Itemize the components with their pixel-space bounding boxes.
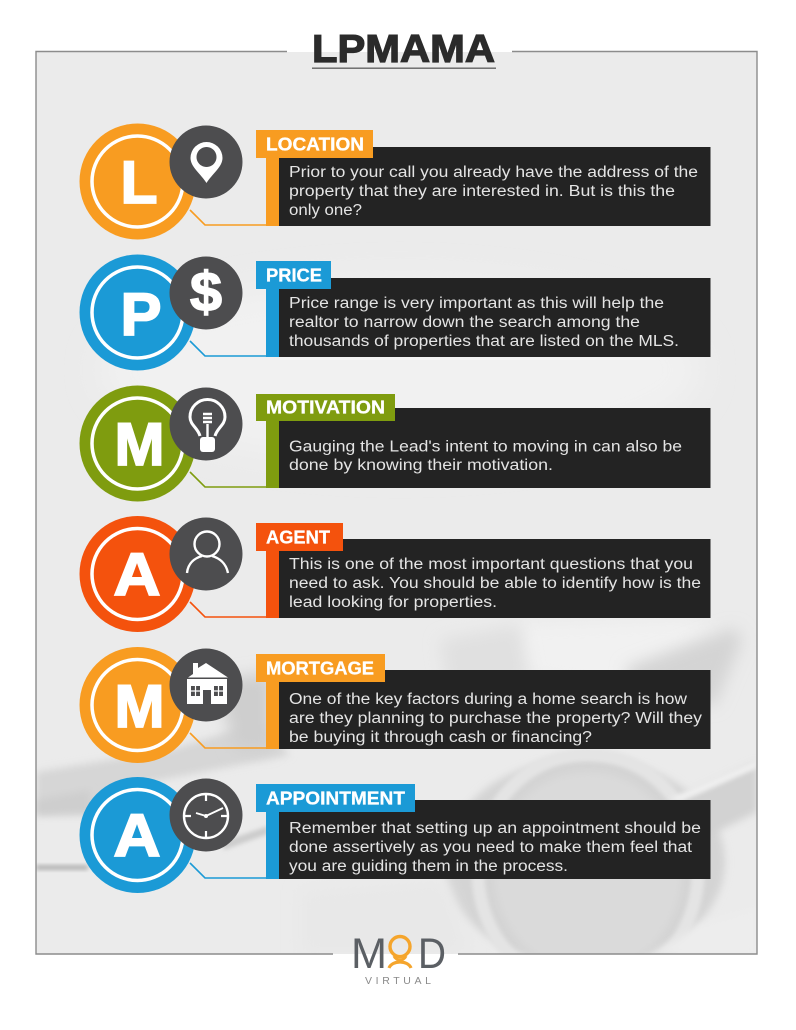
label tab (256, 654, 385, 749)
description box: done by knowing their motivation. (289, 457, 553, 474)
row: location (80, 124, 710, 240)
icon: map pin (170, 126, 242, 198)
letter badge M: M (114, 673, 164, 740)
letter badge M (80, 647, 196, 763)
row: mortgage (80, 647, 710, 763)
icon: clock (170, 778, 242, 852)
description box (279, 670, 710, 749)
description box: only one? (289, 202, 362, 219)
letter badge A: A (114, 802, 160, 869)
label tab: LOCATION (266, 134, 364, 154)
logo: M (351, 930, 387, 978)
connector line (190, 733, 268, 748)
label tab: PRICE (266, 266, 322, 286)
description box (279, 539, 710, 618)
icon: light bulb (170, 388, 242, 460)
letter badge L (80, 124, 196, 240)
letter badge A: A (114, 541, 160, 608)
label tab: APPOINTMENT (266, 788, 405, 808)
description box: done assertively as you need to make them feel that (289, 839, 693, 856)
connector line (190, 863, 268, 878)
icon: dollar sign (170, 256, 242, 330)
letter badge A (80, 516, 196, 632)
connector line (190, 472, 268, 487)
row: agent (80, 516, 710, 632)
letter badge M (80, 386, 196, 502)
description box: This is one of the most important questions that you (289, 556, 693, 573)
logo: D (418, 930, 446, 978)
letter badge A (80, 777, 196, 893)
row: motivation (80, 386, 710, 502)
letter badge P (80, 254, 196, 370)
description box: you are guiding them in the process. (289, 858, 568, 875)
label tab: MORTGAGE (266, 658, 374, 678)
panel border (36, 52, 757, 954)
description box: property that they are interested in. But is this the (289, 183, 675, 200)
description box: Prior to your call you already have the address of the (289, 164, 698, 181)
icon: house (170, 648, 242, 722)
letter badge L: L (120, 149, 158, 216)
description box (279, 800, 710, 879)
description box: Gauging the Lead's intent to moving in can also be (289, 438, 682, 456)
label tab (256, 784, 415, 879)
label tab (256, 523, 343, 618)
description box: be buying it through cash or financing? (289, 729, 592, 746)
row: appointment (80, 777, 710, 893)
connector line (190, 210, 268, 225)
row: price (80, 254, 710, 370)
description box: are they planning to purchase the property? Will they (289, 710, 702, 727)
icon: person (170, 518, 242, 590)
label tab (256, 130, 373, 226)
icon: dollar sign: $ (190, 260, 222, 323)
description box (279, 408, 710, 488)
logo (351, 930, 446, 987)
letter badge P: P (120, 281, 162, 348)
description box: thousands of properties that are listed on the MLS. (289, 333, 679, 350)
title: LPMAMA (312, 28, 495, 71)
description box: realtor to narrow down the search among the (289, 314, 640, 331)
label tab (256, 394, 395, 488)
label tab (256, 261, 331, 357)
description box (279, 147, 710, 226)
description box: Price range is very important as this will help the (289, 295, 664, 312)
description box (279, 278, 710, 357)
connector line (190, 341, 268, 356)
description box: need to ask. You should be able to identify how is the (289, 575, 701, 592)
description box: Remember that setting up an appointment should be (289, 820, 701, 837)
description box: One of the key factors during a home search is how (289, 691, 688, 708)
icon: orange person O (389, 936, 411, 968)
connector line (190, 602, 268, 617)
logo: VIRTUAL (365, 975, 431, 987)
label tab: MOTIVATION (266, 398, 385, 418)
description box: lead looking for properties. (289, 594, 497, 611)
letter badge M: M (114, 411, 164, 478)
label tab: AGENT (266, 528, 330, 548)
